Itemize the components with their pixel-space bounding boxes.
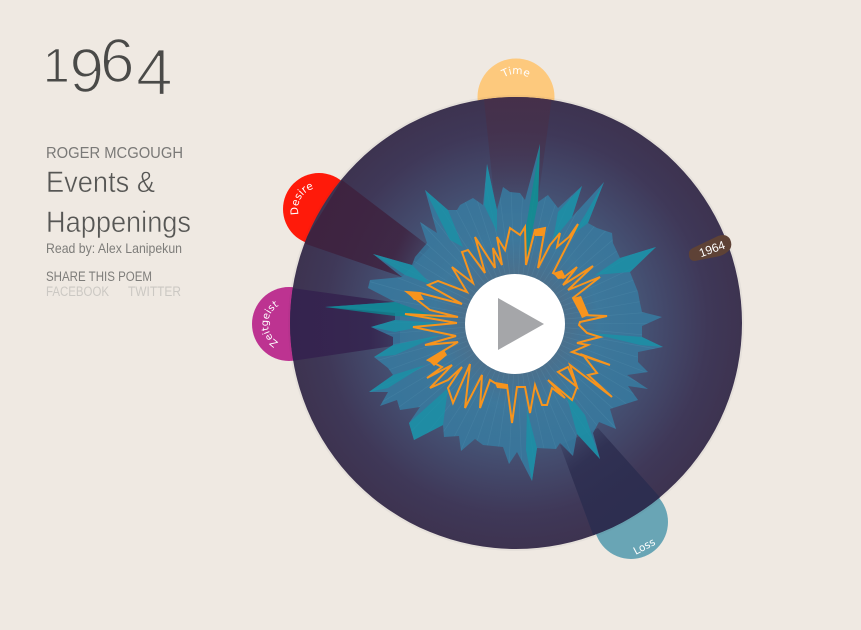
topic bubble: Loss: Loss xyxy=(631,536,657,558)
play button xyxy=(465,274,565,374)
teal spikes xyxy=(325,144,663,481)
main disc xyxy=(285,90,744,551)
topic bubble: Loss xyxy=(594,485,668,559)
topic bubble: Desire: Desire xyxy=(290,184,313,214)
orange waveform xyxy=(405,224,612,423)
beam: Zeitgeist xyxy=(290,288,395,361)
title: 1 xyxy=(43,40,70,93)
title: 9 xyxy=(70,37,104,106)
topic bubble: Desire xyxy=(283,173,341,242)
topic bubble: Zeitgeist xyxy=(252,287,294,361)
topic bubble: Zeitgeist: Zeitgeist xyxy=(262,301,278,348)
beam: Desire xyxy=(303,180,430,277)
playhead marker: 1964 xyxy=(689,235,731,261)
book title: Events & xyxy=(46,166,155,199)
twitter link: TWITTER xyxy=(128,284,181,299)
book title: Happenings xyxy=(46,206,191,239)
text block: poem details xyxy=(46,145,191,299)
topic bubble: Time xyxy=(478,58,554,100)
title: 4 xyxy=(136,35,173,109)
beam: Loss xyxy=(560,428,665,540)
title: 6 xyxy=(100,27,134,96)
beam: Time xyxy=(484,97,552,190)
beams from topics xyxy=(285,90,665,540)
book title xyxy=(46,166,191,239)
radial chart: blue area xyxy=(325,144,663,481)
topic bubble: Time: Time xyxy=(500,66,530,77)
playhead marker: 1964: 1964 xyxy=(697,238,727,260)
author: ROGER MCGOUGH xyxy=(46,145,183,162)
facebook link: FACEBOOK xyxy=(46,284,109,299)
orange thick segments xyxy=(407,228,589,389)
title xyxy=(43,27,173,109)
share heading: SHARE THIS POEM xyxy=(46,269,152,284)
reader: Read by: Alex Lanipekun xyxy=(46,240,182,256)
